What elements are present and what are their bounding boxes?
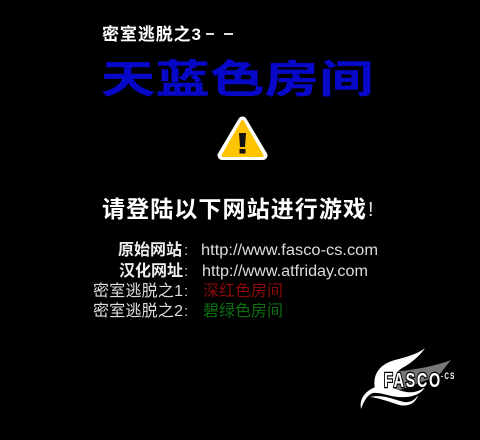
- subtitle: 密室逃脱之3: [102, 24, 201, 44]
- link: viridian room: 碧绿色房间: [203, 302, 283, 320]
- logo: FASCO-CS: [361, 348, 454, 409]
- title: 天蓝色房间: [101, 58, 373, 102]
- colon: escape 2: :: [184, 303, 188, 320]
- heading: login prompt: 请登陆以下网站进行游戏: [102, 196, 366, 222]
- icon: warning triangle: [222, 121, 263, 156]
- logo: FASCO-CS: -CS: [441, 371, 454, 381]
- label: localized site: 汉化网址: [119, 261, 183, 280]
- heading: login prompt: !: [368, 199, 374, 221]
- link list: [93, 241, 378, 320]
- colon: original site: :: [184, 242, 188, 259]
- label: escape 1: 密室逃脱之1: [93, 282, 183, 300]
- label: original site: 原始网站: [118, 241, 182, 259]
- colon: localized site: :: [184, 263, 188, 280]
- label: escape 2: 密室逃脱之2: [93, 302, 183, 320]
- url: original site: http://www.fasco-cs.com: [201, 242, 378, 259]
- logo: FASCO-CS: FASCO: [384, 369, 440, 392]
- colon: escape 1: :: [184, 283, 188, 300]
- link: crimson room: 深红色房间: [203, 282, 283, 300]
- url: localized site: http://www.atfriday.com: [202, 263, 368, 280]
